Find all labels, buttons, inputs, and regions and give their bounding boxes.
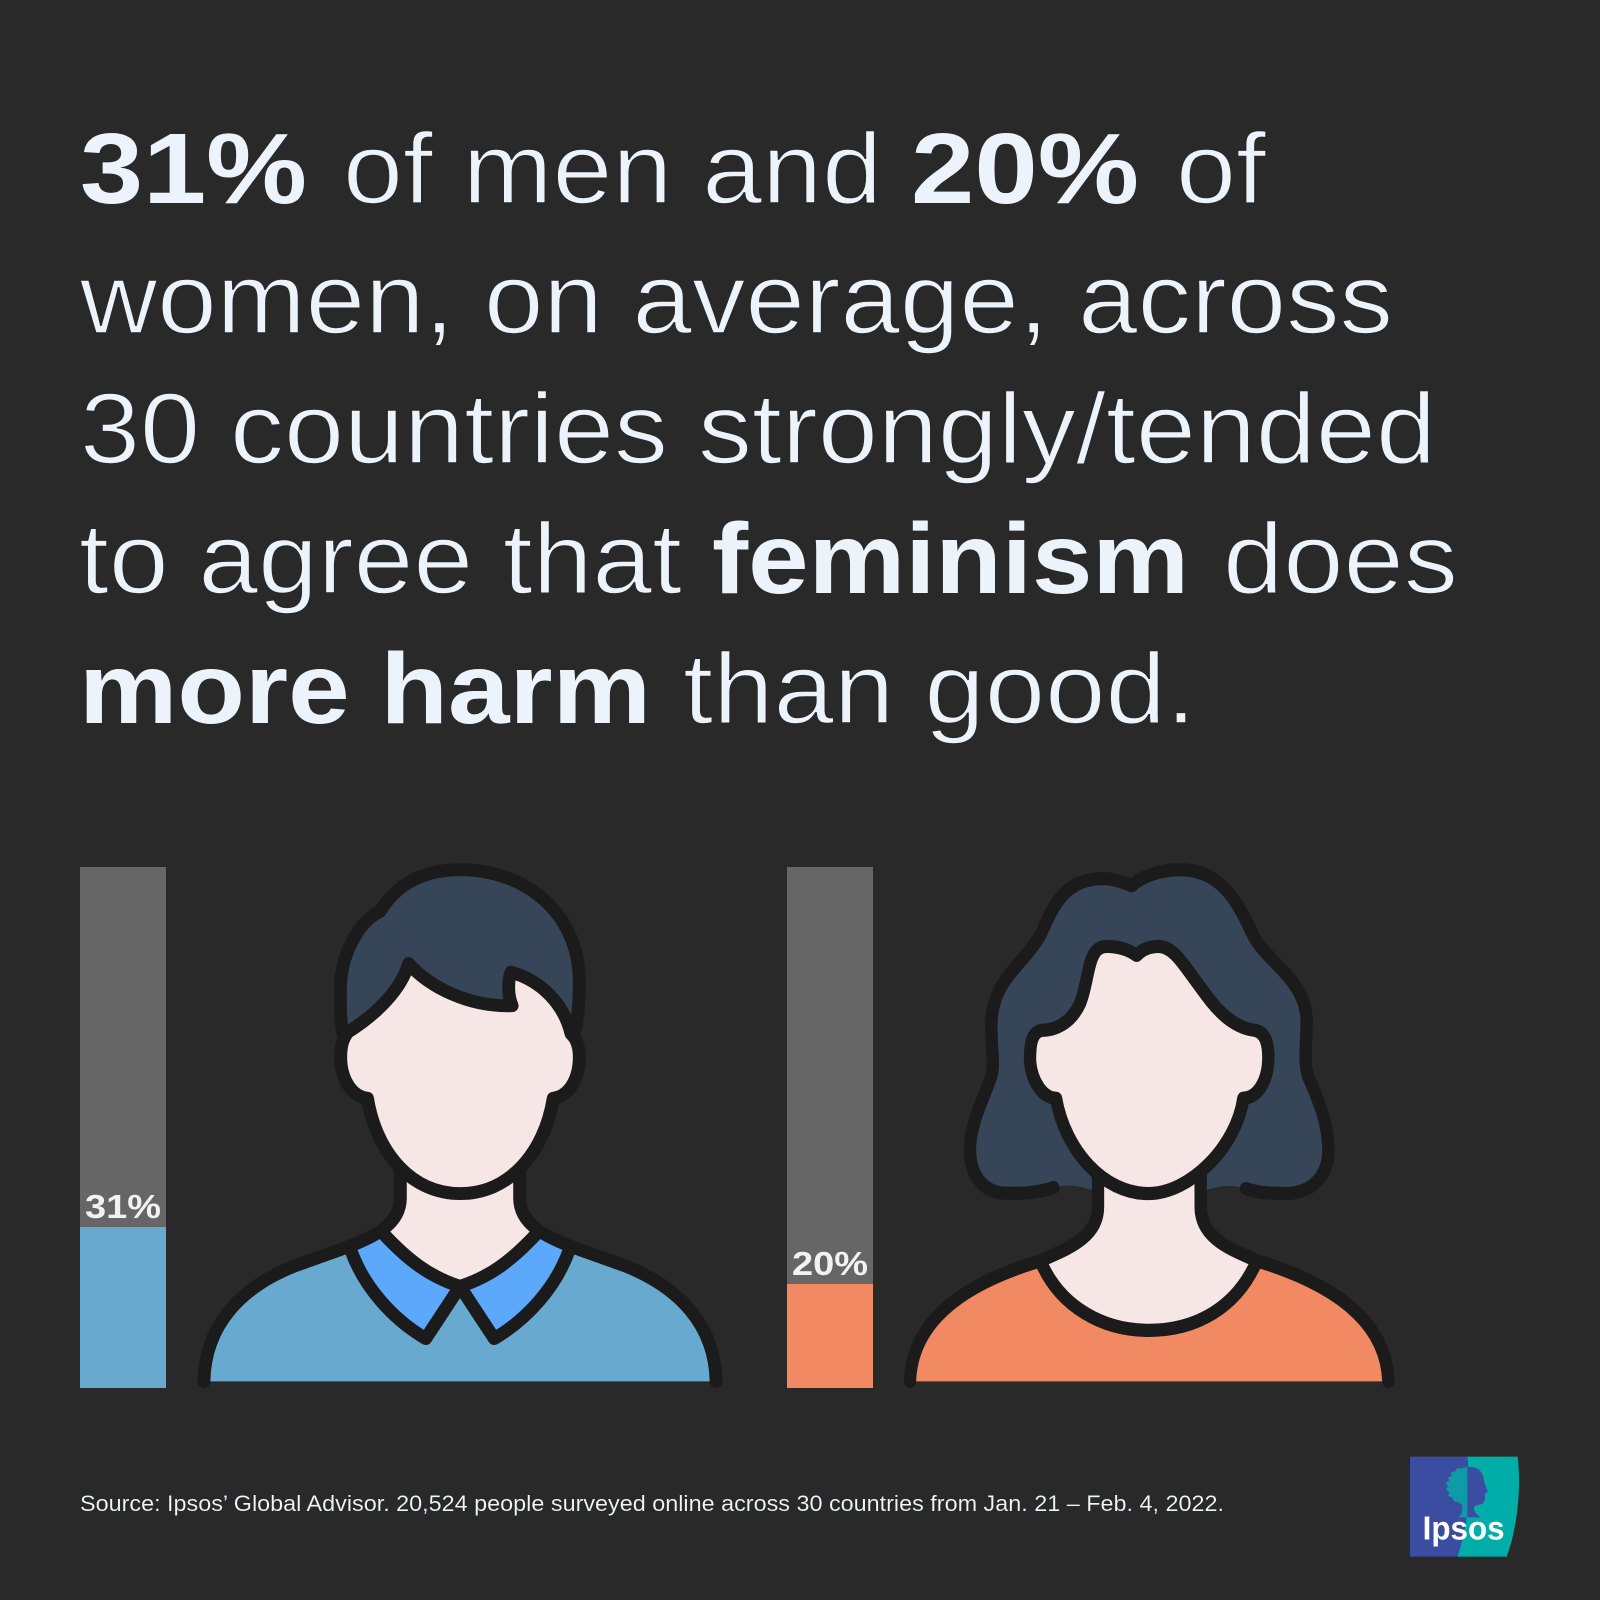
title: of men and — [343, 113, 882, 225]
source note: Source: Ipsos’ Global Advisor. 20,524 people surveyed online across 30 countries from Jan. 21 – Feb. 4, 2022. — [80, 1491, 1224, 1516]
title: 30 countries strongly/tended — [80, 373, 1436, 485]
bar chart: women 20% — [787, 867, 873, 1388]
title: 31% — [80, 113, 307, 225]
logo: Ipsos — [1410, 1457, 1519, 1557]
title: women, on average, across — [79, 243, 1393, 355]
logo: Ipsos: Ipsos — [1423, 1510, 1505, 1547]
title: more harm — [79, 633, 651, 745]
bar chart: men 31%: 31% — [85, 1188, 161, 1225]
title: does — [1223, 503, 1458, 615]
title: to agree that — [79, 503, 682, 615]
title: 20% — [911, 113, 1139, 225]
title: of — [1176, 113, 1266, 225]
icon: woman — [910, 870, 1388, 1381]
title — [79, 113, 1458, 745]
title: feminism — [712, 503, 1189, 615]
bar chart: women 20%: 20% — [792, 1245, 868, 1282]
icon: man — [204, 870, 716, 1381]
bar chart: men 31% — [80, 867, 166, 1388]
title: than good. — [683, 633, 1196, 745]
